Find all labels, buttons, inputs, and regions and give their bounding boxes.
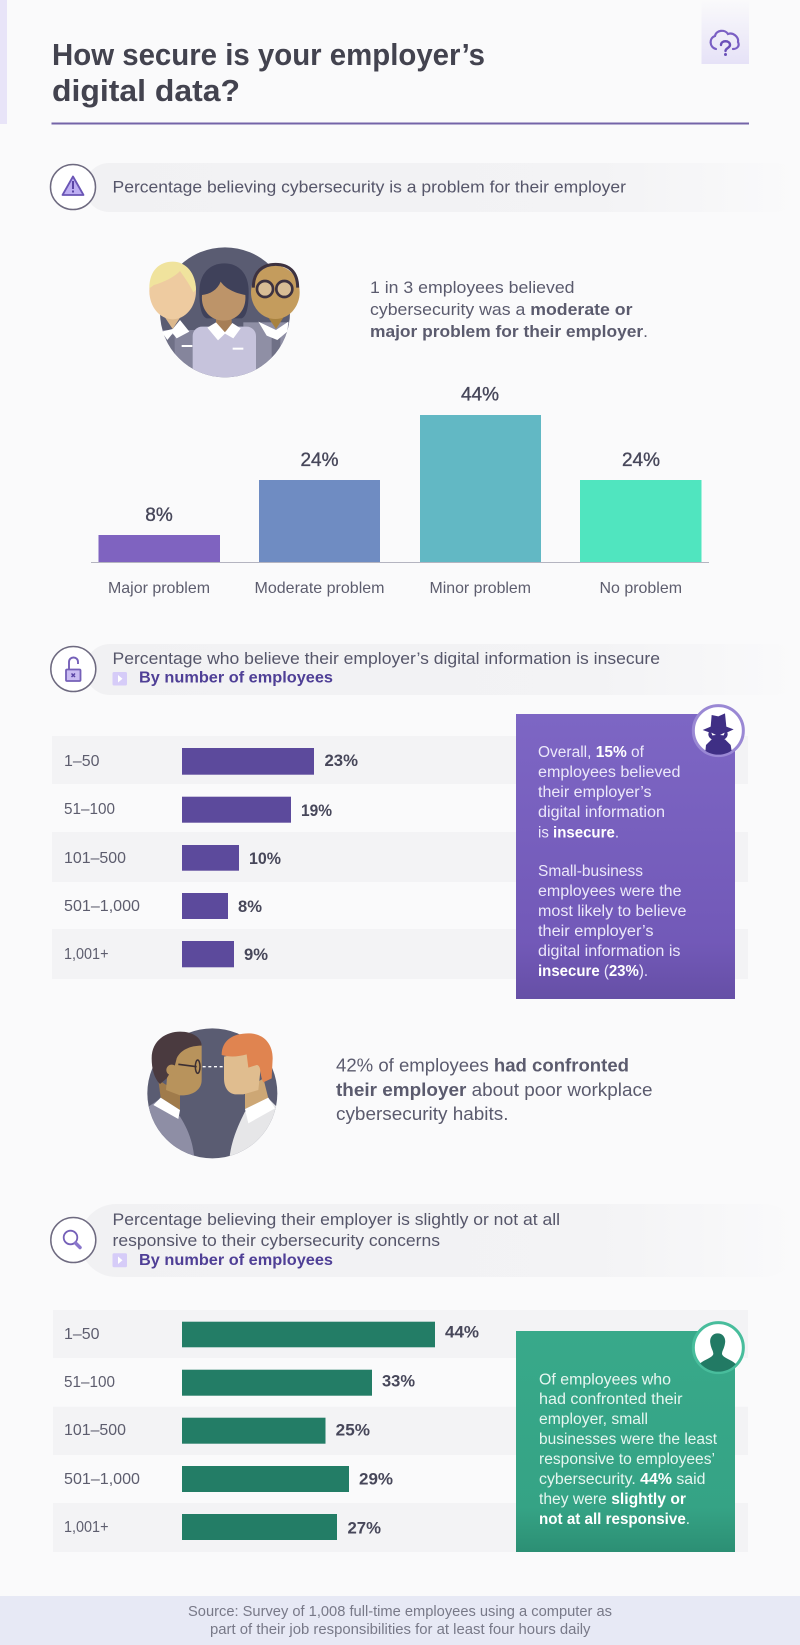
callout: least responsive: not at all responsive. (539, 1511, 690, 1528)
bar: none (580, 450, 702, 597)
icon: three employees illustration (149, 247, 300, 381)
row: 1,001+: 1,001+ (64, 1519, 108, 1536)
source footer: part of their job responsibilities for at least four hours daily (210, 1621, 591, 1638)
callout: overall insecure: Overall, 15% of (538, 744, 645, 761)
row: 1-50: 1–50 (64, 753, 100, 770)
bar: moderate (254, 450, 384, 597)
bar: moderate: Moderate problem (254, 580, 384, 597)
callout: overall insecure (516, 706, 743, 999)
callout: overall insecure: their employer’s (538, 784, 652, 801)
row: 101-500 (52, 832, 748, 882)
row: 1,001+ (53, 1503, 748, 1552)
left person head (152, 1032, 202, 1119)
text: confronted employer: their employer about poor workplace (336, 1080, 652, 1100)
sub-heading: by number of employees: By number of employees (139, 670, 333, 687)
callout: least responsive: responsive to employees’ (539, 1451, 715, 1468)
callout: least responsive: employer, small (539, 1411, 648, 1428)
source footer (0, 1596, 800, 1645)
center person head (199, 263, 249, 340)
icon: cloud question tab (702, 0, 749, 64)
row: 1,001+ (52, 929, 748, 979)
bar: major: 8% (145, 505, 173, 526)
bar: minor: 44% (461, 384, 499, 406)
row: 1-50: 1–50 (64, 1326, 100, 1343)
callout: overall insecure: Small-business (538, 863, 643, 880)
row: 101-500: 10% (249, 850, 281, 868)
source footer: Source: Survey of 1,008 full-time employees using a computer as (188, 1603, 612, 1620)
icon: two people confronting illustration (143, 1028, 280, 1160)
right person head (222, 1033, 275, 1123)
callout: least responsive: had confronted their (539, 1391, 682, 1408)
row: 1-50: 44% (445, 1324, 479, 1342)
icon: warning triangle (50, 164, 96, 210)
icon: spy badge (693, 706, 743, 756)
callout: least responsive: businesses were the least (539, 1431, 718, 1448)
callout: overall insecure: employees believed (538, 764, 680, 781)
text: one in three (370, 278, 648, 341)
panel: insecure section header: Percentage who believe their employer’s digital information is insecure (112, 649, 660, 668)
table: insecure by employer size (52, 736, 748, 979)
callout: overall insecure: insecure (23%). (538, 963, 648, 980)
row: 101-500: 101–500 (64, 1422, 126, 1439)
bar: none: 24% (622, 450, 660, 471)
sub-heading: by number of employees: By number of employees (139, 1252, 333, 1269)
panel: problem section header (50, 163, 800, 212)
text: confronted employer: 42% of employees had confronted (336, 1056, 629, 1076)
bar: major (98, 505, 220, 597)
panel: insecure section header (51, 644, 800, 695)
bar: moderate: 24% (300, 450, 339, 471)
callout: least responsive: cybersecurity. 44% said (539, 1471, 706, 1488)
bar: major: Major problem (108, 580, 210, 597)
icon: open padlock (51, 646, 96, 692)
row: 51-100 (64, 797, 332, 823)
row: 1,001+: 1,001+ (64, 946, 108, 963)
callout: overall insecure: digital information is (538, 943, 681, 960)
icon: person badge (693, 1323, 743, 1373)
text: one in three: major problem for their employer . (370, 322, 648, 341)
bar: none: No problem (600, 580, 682, 597)
row: 51-100: 33% (382, 1373, 415, 1391)
callout: overall insecure: digital information (538, 804, 665, 821)
row: 101-500: 101–500 (64, 850, 126, 867)
title: digital data? (52, 73, 240, 108)
panel: responsiveness section header (51, 1204, 800, 1277)
title: How secure is your employer’s (52, 37, 485, 72)
callout: least responsive: Of employees who (539, 1371, 671, 1388)
row: 101-500: 25% (336, 1422, 370, 1440)
text: confronted employer (336, 1056, 652, 1124)
row: 101-500 (53, 1407, 748, 1455)
row: 51-100: 19% (301, 802, 332, 820)
dotted gaze line (203, 1065, 223, 1069)
row: 1,001+: 9% (244, 946, 268, 964)
right person head (251, 264, 300, 340)
icon: magnifying glass (51, 1218, 96, 1262)
row: 1-50: 23% (324, 752, 358, 770)
row: 501-1,000: 501–1,000 (64, 1471, 140, 1488)
panel: responsiveness section header: responsive to their cybersecurity concerns (112, 1231, 440, 1250)
title (52, 37, 485, 108)
panel: problem section header: Percentage believing cybersecurity is a problem for their employer (112, 178, 626, 196)
callout: overall insecure: most likely to believe (538, 903, 686, 920)
callout: least responsive (516, 1323, 743, 1552)
bar: minor: Minor problem (430, 580, 531, 597)
row: 501-1,000: 8% (238, 898, 262, 916)
row: 51-100: 51–100 (64, 1374, 115, 1391)
row: 501-1,000 (64, 1466, 393, 1492)
left person head (149, 262, 196, 340)
bar: minor (420, 384, 541, 597)
row: 1-50 (52, 736, 748, 784)
row: 1-50 (53, 1310, 748, 1358)
row: 501-1,000 (64, 893, 262, 919)
row: 1,001+: 27% (348, 1520, 381, 1538)
panel: responsiveness section header: Percentage believing their employer is slightly or not at all (112, 1210, 560, 1229)
text: one in three: cybersecurity was a moderate or (370, 300, 633, 319)
row: 501-1,000: 501–1,000 (64, 898, 140, 915)
callout: least responsive: they were slightly or (539, 1491, 686, 1508)
text: confronted employer: cybersecurity habits. (336, 1104, 508, 1124)
callout: overall insecure: is insecure. (538, 824, 619, 842)
text: one in three: 1 in 3 employees believed (370, 278, 574, 297)
table: responsiveness by employer size (53, 1310, 748, 1552)
row: 51-100: 51–100 (64, 801, 115, 818)
callout: overall insecure: employees were the (538, 883, 682, 900)
bar chart: problem severity (91, 384, 709, 597)
row: 51-100 (64, 1370, 415, 1396)
row: 501-1,000: 29% (359, 1471, 393, 1489)
callout: overall insecure: their employer’s (538, 923, 654, 940)
